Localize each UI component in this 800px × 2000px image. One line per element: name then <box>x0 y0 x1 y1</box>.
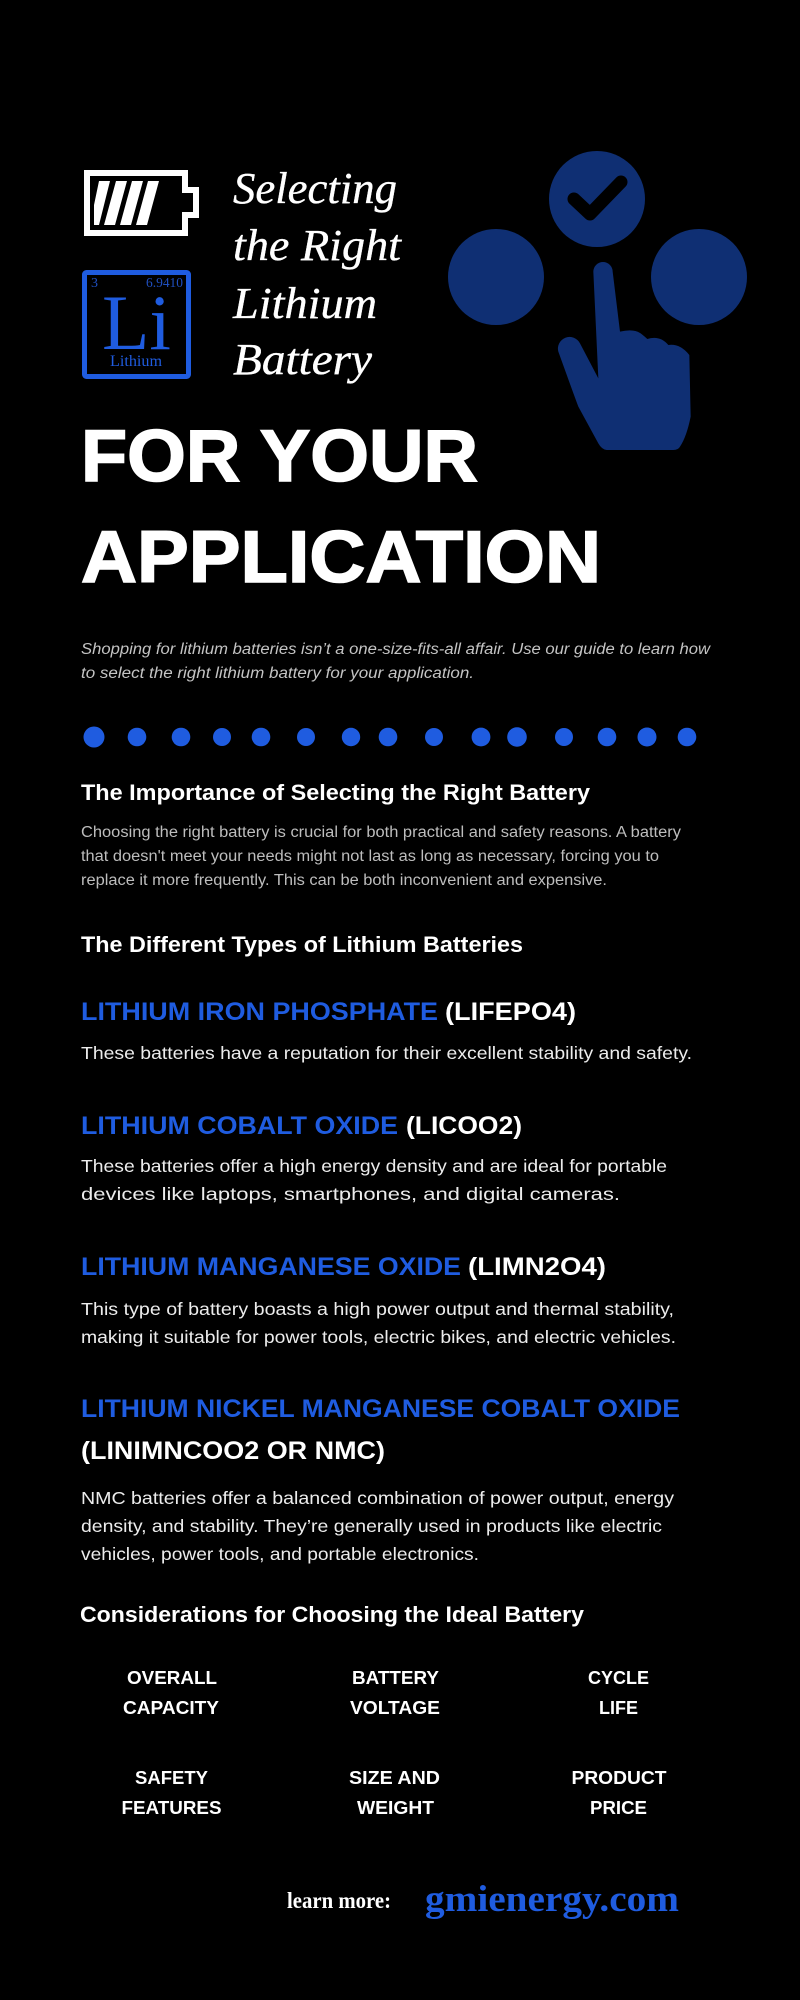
battery type: lithium manganese oxide: (LIMN2O4) <box>468 1253 606 1281</box>
item: product price: PRODUCT <box>572 1767 667 1788</box>
section: importance of selecting the right battery <box>81 780 681 889</box>
title: italic serif lines: the Right <box>233 221 403 270</box>
battery type: lithium cobalt oxide <box>81 1112 667 1204</box>
item: safety features <box>122 1767 222 1818</box>
item: cycle life <box>588 1667 649 1718</box>
icon: lithium periodic table element: 3 <box>91 276 98 291</box>
item: overall capacity: CAPACITY <box>123 1697 220 1718</box>
battery type: lithium cobalt oxide: LITHIUM COBALT OXIDE <box>81 1112 398 1140</box>
icon: battery <box>84 170 199 236</box>
item: size and weight <box>349 1767 440 1818</box>
intro text: to select the right lithium battery for your application. <box>81 665 474 682</box>
item: product price: PRICE <box>590 1797 647 1818</box>
icon: lithium periodic table element: Li <box>102 279 171 366</box>
intro text: Shopping for lithium batteries isn’t a one-size-fits-all affair. Use our guide to learn how <box>81 641 712 658</box>
heading: The Importance of Selecting the Right Battery <box>81 780 590 805</box>
battery type: lithium iron phosphate: LITHIUM IRON PHOSPHATE <box>81 998 438 1026</box>
title: italic serif lines <box>232 164 403 384</box>
item: product price <box>572 1767 667 1818</box>
battery type: lithium manganese oxide: LITHIUM MANGANESE OXIDE <box>81 1253 461 1281</box>
footer call to action: learn more: <box>287 1888 391 1913</box>
considerations grid <box>122 1667 667 1818</box>
heading: considerations: Considerations for Choosing the Ideal Battery <box>80 1602 584 1627</box>
title: italic serif lines: Battery <box>233 335 372 384</box>
battery type: lithium nickel manganese cobalt oxide: (LINIMNCOO2 OR NMC) <box>81 1437 385 1465</box>
battery type: lithium manganese oxide: This type of battery boasts a high power output and thermal stability, <box>81 1299 674 1319</box>
item: cycle life: LIFE <box>599 1697 638 1718</box>
item: battery voltage <box>350 1667 440 1718</box>
item: cycle life: CYCLE <box>588 1667 649 1688</box>
intro text <box>81 641 712 682</box>
battery type: lithium manganese oxide: making it suitable for power tools, electric bikes, and electric vehicles. <box>81 1327 676 1347</box>
item: battery voltage: VOLTAGE <box>350 1697 440 1718</box>
footer call to action: gmienergy.com <box>425 1879 679 1920</box>
heading: for your application: APPLICATION <box>81 517 601 598</box>
battery type: lithium nickel manganese cobalt oxide: LITHIUM NICKEL MANGANESE COBALT OXIDE <box>81 1395 680 1423</box>
dotted divider <box>84 726 696 748</box>
item: safety features: FEATURES <box>122 1797 222 1818</box>
battery type: lithium manganese oxide <box>81 1253 676 1347</box>
battery type: lithium cobalt oxide: devices like laptops, smartphones, and digital cameras. <box>81 1184 620 1204</box>
item: safety features: SAFETY <box>135 1767 209 1788</box>
item: size and weight: WEIGHT <box>357 1797 435 1818</box>
battery type: lithium cobalt oxide: These batteries offer a high energy density and are ideal for portable <box>81 1156 667 1176</box>
battery type: lithium nickel manganese cobalt oxide: vehicles, power tools, and portable electronics. <box>81 1544 479 1564</box>
heading: for your application: FOR YOUR <box>81 416 478 497</box>
battery type: lithium iron phosphate: (LIFEPO4) <box>445 998 576 1026</box>
paragraph <box>81 824 681 889</box>
title: italic serif lines: Lithium <box>232 279 377 328</box>
item: overall capacity <box>123 1667 220 1718</box>
battery type: lithium nickel manganese cobalt oxide: density, and stability. They’re generally used in products like electric <box>81 1516 662 1536</box>
icon: lithium periodic table element <box>84 272 188 376</box>
battery type: lithium cobalt oxide: (LICOO2) <box>406 1112 522 1140</box>
paragraph: Choosing the right battery is crucial for both practical and safety reasons. A battery <box>81 824 681 841</box>
icon: hand selecting an option <box>448 151 747 450</box>
heading: for your application <box>81 416 601 598</box>
title: italic serif lines: Selecting <box>233 164 397 213</box>
paragraph: replace it more frequently. This can be both inconvenient and expensive. <box>81 872 607 889</box>
battery type: lithium iron phosphate <box>81 998 692 1063</box>
icon: lithium periodic table element: Lithium <box>110 353 163 370</box>
footer call to action <box>287 1879 679 1920</box>
battery type: lithium nickel manganese cobalt oxide: NMC batteries offer a balanced combination of power output, energy <box>81 1488 674 1508</box>
paragraph: that doesn't meet your needs might not last as long as necessary, forcing you to <box>81 848 659 865</box>
item: size and weight: SIZE AND <box>349 1767 440 1788</box>
icon: lithium periodic table element: 6.9410 <box>146 276 183 291</box>
heading: types of lithium batteries: The Different Types of Lithium Batteries <box>81 932 523 957</box>
item: overall capacity: OVERALL <box>127 1667 217 1688</box>
battery type: lithium nickel manganese cobalt oxide <box>81 1395 680 1564</box>
battery type: lithium iron phosphate: These batteries have a reputation for their excellent stability and safety. <box>81 1043 692 1063</box>
item: battery voltage: BATTERY <box>352 1667 440 1688</box>
